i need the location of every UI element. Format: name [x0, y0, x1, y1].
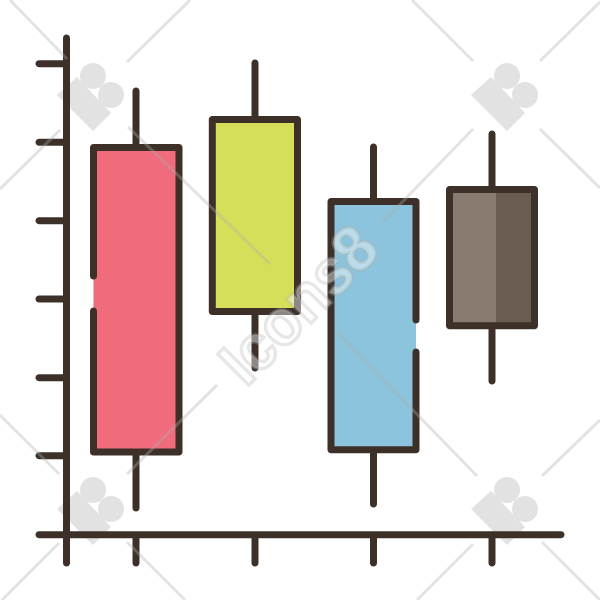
candle: yellow-green — [212, 63, 298, 368]
y axis with ticks — [39, 38, 66, 563]
watermark logo: bottom right — [471, 477, 538, 545]
candle: brown — [450, 134, 534, 381]
watermark logo: top right — [471, 63, 538, 131]
watermark logo: top left — [57, 63, 124, 131]
watermark logo: bottom left — [57, 477, 124, 545]
candle: blue — [331, 147, 416, 504]
candle: red — [94, 91, 179, 508]
watermark logos — [57, 63, 538, 545]
candlestick chart — [39, 38, 561, 563]
watermark text: Icons8 — [205, 211, 392, 398]
x axis with ticks — [39, 535, 561, 563]
